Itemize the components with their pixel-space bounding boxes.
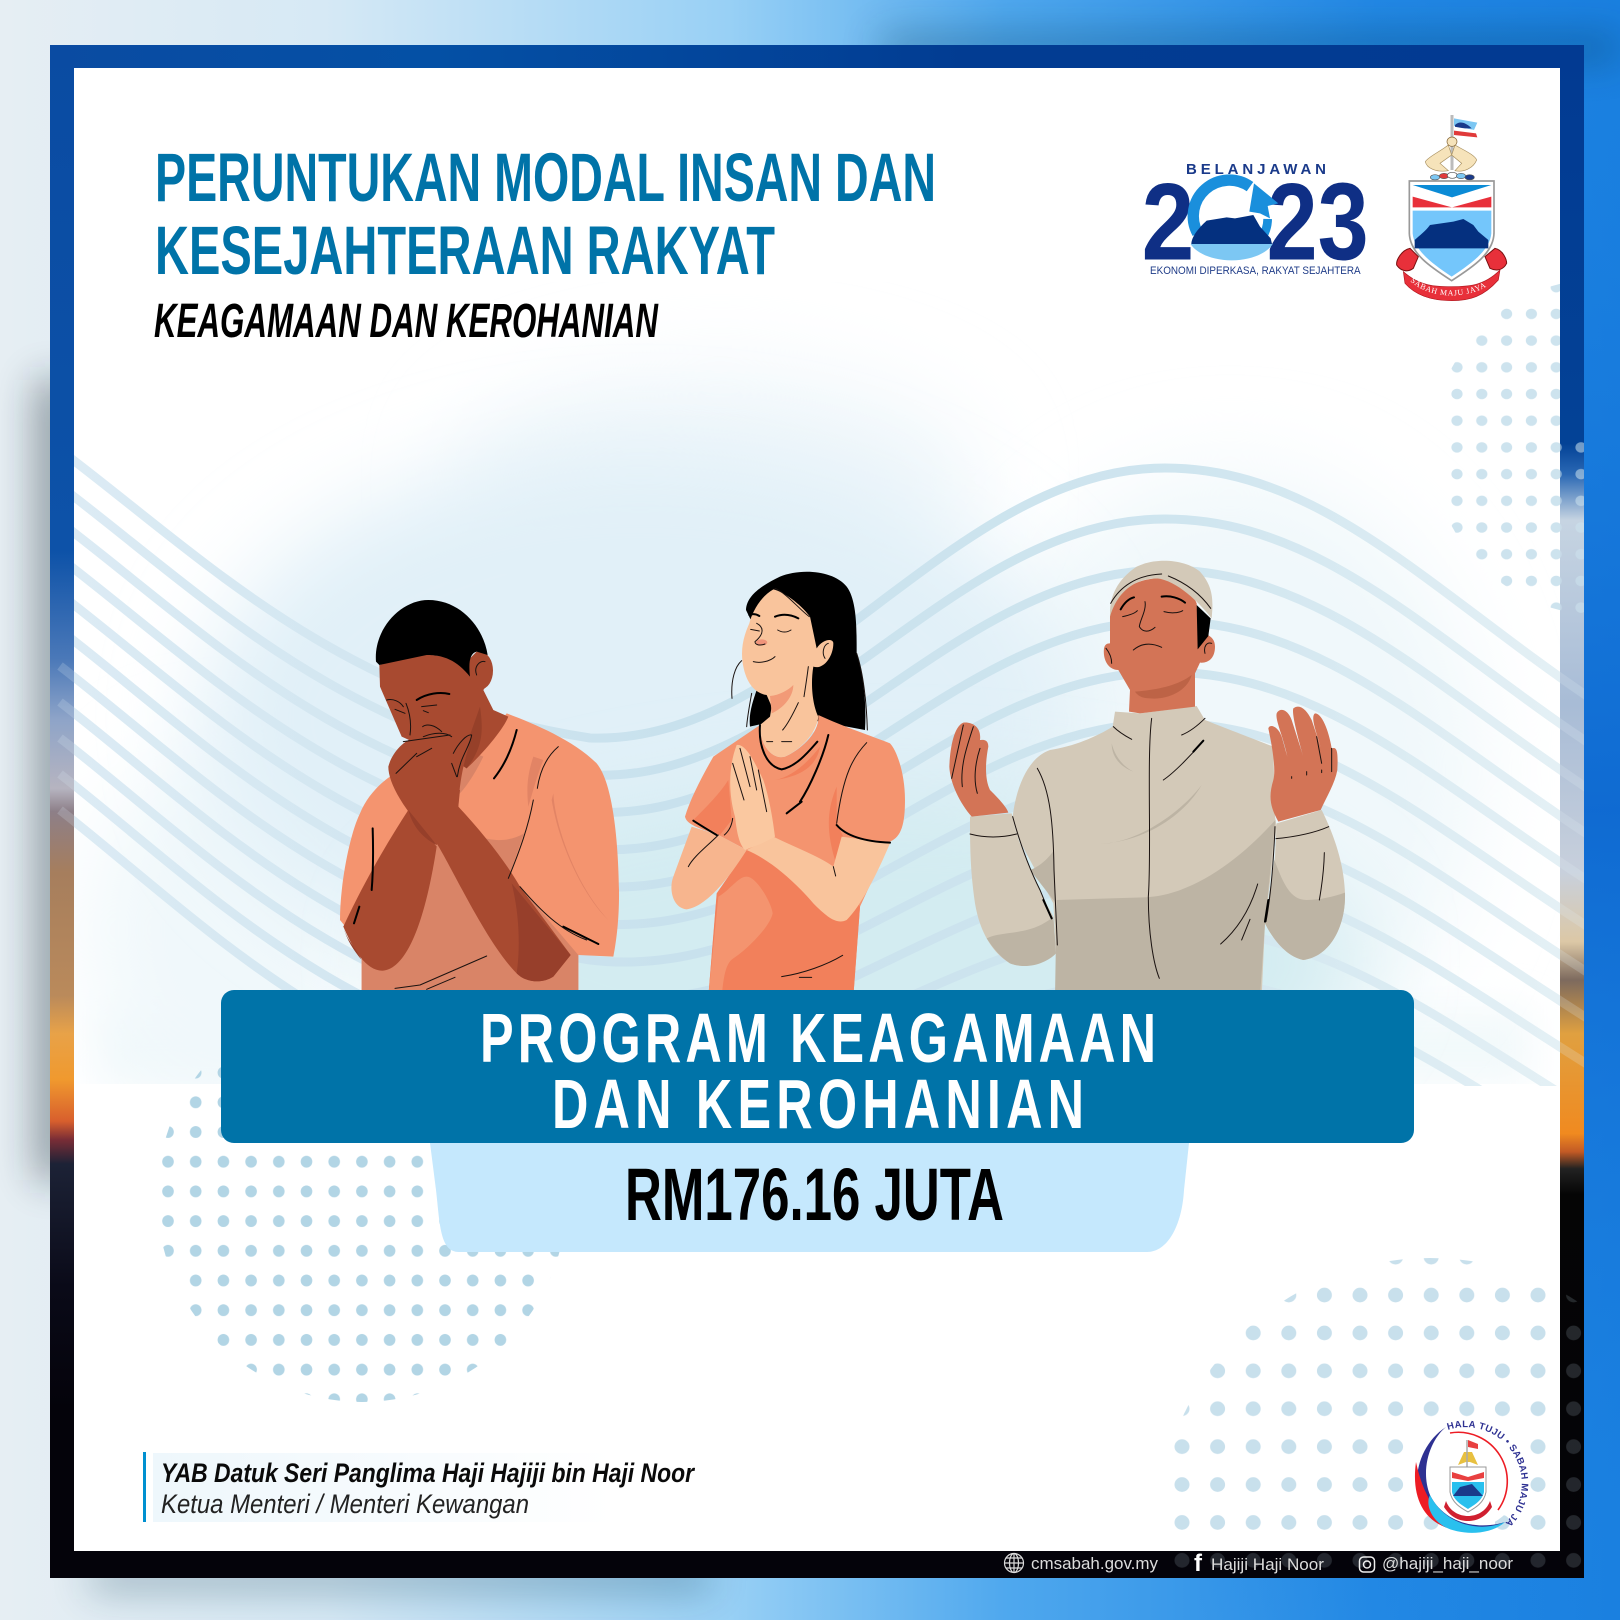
- title: KESEJAHTERAAN RAKYAT: [155, 212, 775, 289]
- wave lines over frame: [58, 662, 1584, 1068]
- amount tab: [430, 1143, 1189, 1252]
- logo: Sabah coat of arms: SABAH MAJU JAYA: [1410, 278, 1486, 296]
- attribution: Ketua Menteri / Menteri Kewangan: [161, 1489, 529, 1519]
- social footer: @hajiji_haji_noor: [1382, 1554, 1513, 1573]
- logo: Belanjawan 2023: 23: [1267, 160, 1369, 283]
- icon: globe: [1004, 1554, 1024, 1572]
- dots: bottom right: [1160, 1250, 1584, 1578]
- social footer: f: [1194, 1550, 1203, 1577]
- social footer: cmsabah.gov.my: [1031, 1554, 1158, 1573]
- person 2: woman praying with palms together: [671, 572, 905, 997]
- banner text: [480, 999, 1156, 1143]
- title: [155, 139, 936, 289]
- attribution: [143, 1452, 695, 1522]
- subtitle: KEAGAMAAN DAN KEROHANIAN: [154, 295, 659, 348]
- logo: Sabah coat of arms: [1396, 115, 1508, 301]
- amount: RM176.16 JUTA: [625, 1153, 1004, 1236]
- logo: Belanjawan 2023: 2: [1142, 160, 1194, 283]
- logo: Belanjawan 2023: [1142, 160, 1369, 283]
- person 1: man praying with clasped hands: [340, 600, 619, 997]
- wave lines: [74, 455, 1560, 1086]
- dots: top right: [1451, 284, 1584, 612]
- dots: bottom left: [162, 1067, 560, 1402]
- social footer: Hajiji Haji Noor: [1211, 1555, 1324, 1574]
- person 3: man in cap with raised hands: [949, 561, 1345, 997]
- social footer: [1004, 1550, 1513, 1577]
- icon: instagram: [1360, 1557, 1374, 1572]
- logo: Belanjawan 2023: EKONOMI DIPERKASA, RAKYAT SEJAHTERA: [1150, 265, 1361, 277]
- attribution: YAB Datuk Seri Panglima Haji Hajiji bin Haji Noor: [161, 1458, 695, 1488]
- logo: Belanjawan 2023: BELANJAWAN: [1186, 161, 1326, 178]
- banner text: PROGRAM KEAGAMAAN: [480, 999, 1156, 1077]
- logo: Hala Tuju Sabah Maju Jaya: HALA TUJU • SABAH MAJU JAYA: [1446, 1420, 1528, 1526]
- title: PERUNTUKAN MODAL INSAN DAN: [155, 139, 936, 216]
- programme banner: [221, 990, 1414, 1143]
- watercolour cloud background: [90, 370, 1530, 1130]
- banner text: DAN KEROHANIAN: [552, 1065, 1084, 1143]
